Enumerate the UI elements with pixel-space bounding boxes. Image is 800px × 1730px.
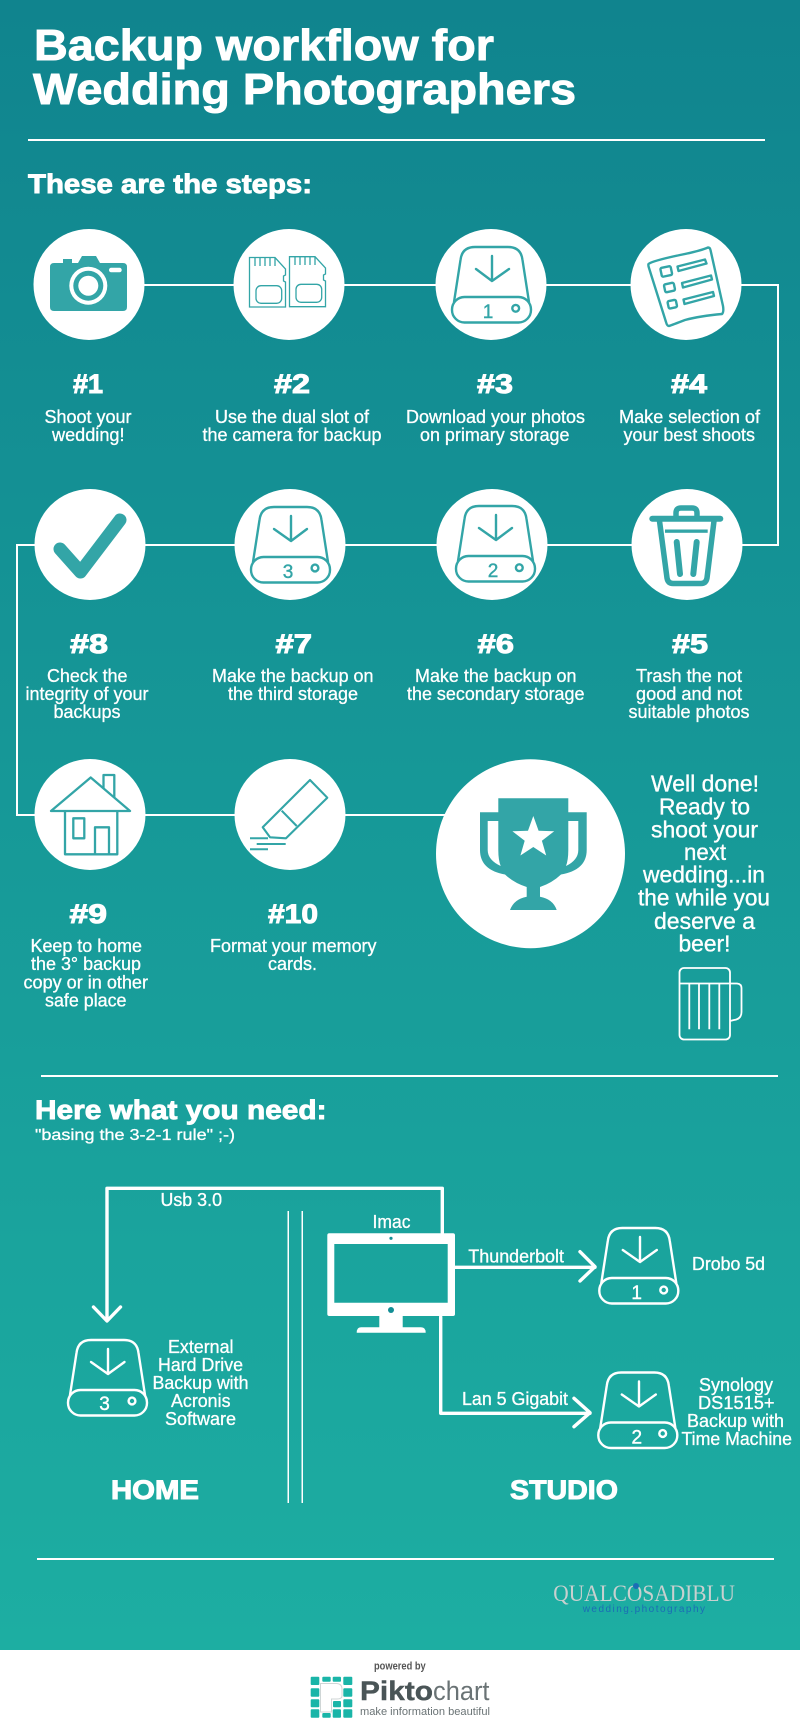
- step number: #2: [274, 369, 310, 399]
- icon: checklist: [648, 248, 723, 326]
- heading: these are the steps: These are the steps:: [28, 169, 312, 199]
- step 8: [26, 489, 148, 722]
- icon: drive 3 external: [68, 1340, 147, 1416]
- icon: drive 1 drobo: [599, 1228, 678, 1304]
- icon: drive 3 external: 3: [99, 1394, 110, 1415]
- heading: here what you need: [35, 1095, 326, 1144]
- label: external drive: Software: [165, 1409, 236, 1429]
- icon: trash can: [649, 508, 723, 584]
- label: imac: Imac: [372, 1212, 410, 1232]
- step 6: [407, 489, 584, 704]
- step number: #10: [268, 899, 318, 929]
- closing message: deserve a: [654, 908, 755, 934]
- step text: wedding!: [51, 425, 124, 445]
- arrow: thunderbolt link: [455, 1252, 595, 1281]
- label: external drive: External: [168, 1337, 234, 1357]
- step text: the secondary storage: [407, 684, 584, 704]
- step 2: [202, 229, 382, 445]
- label: synology: Time Machine: [682, 1429, 792, 1449]
- title: [33, 21, 576, 114]
- label: usb: Usb 3.0: [160, 1190, 222, 1210]
- closing message: shoot your: [651, 816, 758, 842]
- closing message: wedding...in: [642, 862, 765, 888]
- icon: check mark: [60, 520, 120, 572]
- step number: #8: [70, 629, 108, 659]
- heading: here what you need: "basing the 3-2-1 rule" ;-): [35, 1127, 235, 1144]
- step text: Check the: [47, 666, 128, 686]
- icon: eraser: [250, 780, 327, 849]
- closing message: beer!: [678, 931, 730, 957]
- brand logo: qualcosadiblu: QUALCOSADIBLU: [553, 1581, 735, 1606]
- step text: Use the dual slot of: [215, 407, 370, 427]
- step 1: [34, 229, 144, 445]
- step 7: [212, 489, 374, 704]
- footer: piktochart logo: chart: [433, 1676, 490, 1706]
- label: external drive: Backup with: [152, 1373, 248, 1393]
- workflow connector lines: [17, 285, 778, 815]
- step number: #7: [276, 629, 312, 659]
- step text: [26, 666, 148, 722]
- label: thunderbolt: Thunderbolt: [468, 1246, 564, 1266]
- step text: your best shoots: [624, 425, 755, 445]
- icon: hard drive 3: [251, 507, 330, 583]
- icon: memory cards: [250, 257, 326, 307]
- step text: backups: [54, 702, 120, 722]
- step number: #9: [70, 899, 107, 929]
- icon: hard drive 1: [452, 247, 531, 323]
- icon: hard drive 1: 1: [483, 302, 493, 323]
- step text: Shoot your: [44, 407, 132, 427]
- icon: drive 2 synology: 2: [632, 1428, 642, 1448]
- step text: [619, 407, 761, 445]
- step text: [628, 666, 750, 722]
- step 5: [628, 489, 750, 722]
- arrow: usb link to home: [94, 1188, 442, 1321]
- step text: [44, 407, 132, 445]
- trophy badge: [436, 759, 625, 948]
- footer: piktochart logo: Pikto: [360, 1676, 433, 1706]
- step 9: [24, 759, 148, 1010]
- label: lan: Lan 5 Gigabit: [462, 1389, 568, 1409]
- brand logo: qualcosadiblu: wedding.photography: [582, 1604, 705, 1615]
- icon: hard drive 2: [456, 506, 535, 582]
- arrow: lan link: [441, 1317, 590, 1427]
- step text: good and not: [636, 684, 742, 704]
- icon: hard drive 2: 2: [488, 561, 498, 582]
- step 10: [210, 759, 376, 974]
- footer panel: [0, 1650, 800, 1730]
- step text: Make selection of: [619, 407, 761, 427]
- title: Wedding Photographers: [33, 65, 576, 114]
- step text: [24, 936, 148, 1010]
- closing message: Well done!: [651, 770, 759, 796]
- step text: [210, 936, 376, 974]
- icon: drive 2 synology: [598, 1372, 677, 1448]
- step number: #6: [478, 629, 514, 659]
- label: external drive: [152, 1337, 248, 1429]
- icon: piktochart mark: [311, 1677, 352, 1718]
- heading: studio: STUDIO: [510, 1475, 618, 1505]
- step text: cards.: [268, 954, 317, 974]
- step text: Download your photos: [406, 407, 585, 427]
- label: synology: [682, 1375, 792, 1449]
- icon: beer mug: [680, 968, 742, 1040]
- step text: the third storage: [228, 684, 358, 704]
- label: synology: Backup with: [687, 1411, 784, 1431]
- icon: drive 1 drobo: 1: [631, 1283, 642, 1304]
- step text: [406, 407, 585, 445]
- step text: the camera for backup: [202, 425, 382, 445]
- label: external drive: Acronis: [171, 1391, 230, 1411]
- label: drobo: Drobo 5d: [692, 1254, 765, 1274]
- icon: trophy: [480, 798, 587, 910]
- step text: [212, 666, 374, 704]
- step text: on primary storage: [420, 425, 570, 445]
- step text: [202, 407, 382, 445]
- label: synology: DS1515+: [698, 1393, 774, 1413]
- brand logo: qualcosadiblu: [553, 1581, 735, 1615]
- step number: #1: [73, 369, 103, 399]
- closing message: the while you: [638, 885, 770, 911]
- step text: Make the backup on: [212, 666, 374, 686]
- closing message: next: [684, 839, 727, 865]
- step number: #3: [477, 369, 513, 399]
- step text: integrity of your: [26, 684, 148, 704]
- footer: piktochart logo: [311, 1660, 490, 1718]
- icon: imac monitor: [327, 1233, 455, 1333]
- icon: house: [51, 775, 130, 854]
- icon: camera: [50, 256, 127, 311]
- label: synology: Synology: [699, 1375, 773, 1395]
- footer: piktochart logo: make information beautiful: [360, 1706, 490, 1718]
- step text: [407, 666, 584, 704]
- step text: Trash the not: [636, 666, 742, 686]
- title: Backup workflow for: [34, 21, 494, 70]
- closing message: Ready to: [659, 793, 750, 819]
- step text: copy or in other: [24, 972, 148, 992]
- step number: #5: [672, 629, 708, 659]
- closing message: [638, 770, 770, 957]
- heading: home: HOME: [111, 1475, 199, 1505]
- step text: the 3° backup: [31, 954, 141, 974]
- step text: Keep to home: [30, 936, 142, 956]
- label: external drive: Hard Drive: [158, 1355, 243, 1375]
- step text: Format your memory: [210, 936, 376, 956]
- icon: hard drive 3: 3: [283, 562, 293, 583]
- heading: here what you need: Here what you need:: [35, 1095, 326, 1125]
- step 3: [406, 229, 585, 445]
- step text: safe place: [45, 990, 126, 1010]
- step text: Make the backup on: [415, 666, 576, 686]
- step 4: [619, 229, 761, 445]
- step number: #4: [671, 369, 707, 399]
- step text: suitable photos: [628, 702, 750, 722]
- footer: piktochart logo: powered by: [374, 1660, 426, 1672]
